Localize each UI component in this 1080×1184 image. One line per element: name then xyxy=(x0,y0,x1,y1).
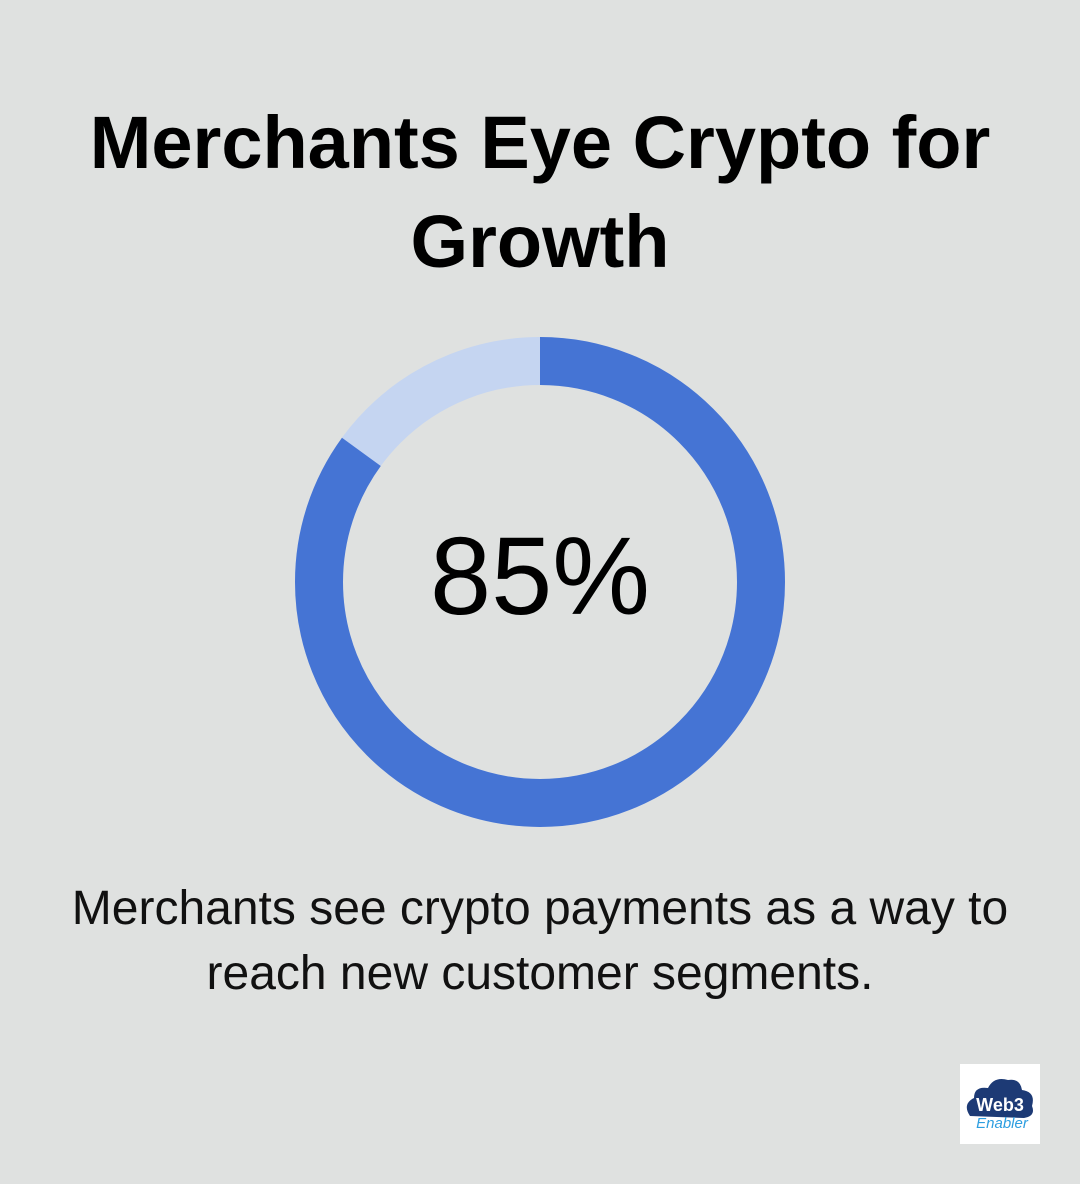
donut: 85% segment xyxy=(319,361,761,803)
description text: Merchants see crypto payments as a way to xyxy=(72,882,1008,935)
percentage value: 85% xyxy=(430,515,650,638)
title xyxy=(90,101,990,283)
logo: Web3 Enabler xyxy=(960,1064,1040,1144)
title: Merchants Eye Crypto for xyxy=(90,101,990,184)
description text: reach new customer segments. xyxy=(207,947,873,1000)
title: Growth xyxy=(411,200,669,283)
logo: Web3 Enabler: Web3 xyxy=(976,1095,1024,1115)
description text xyxy=(72,882,1008,1000)
donut: remaining 15% xyxy=(319,361,761,803)
logo: Web3 Enabler: Enabler xyxy=(976,1115,1029,1132)
